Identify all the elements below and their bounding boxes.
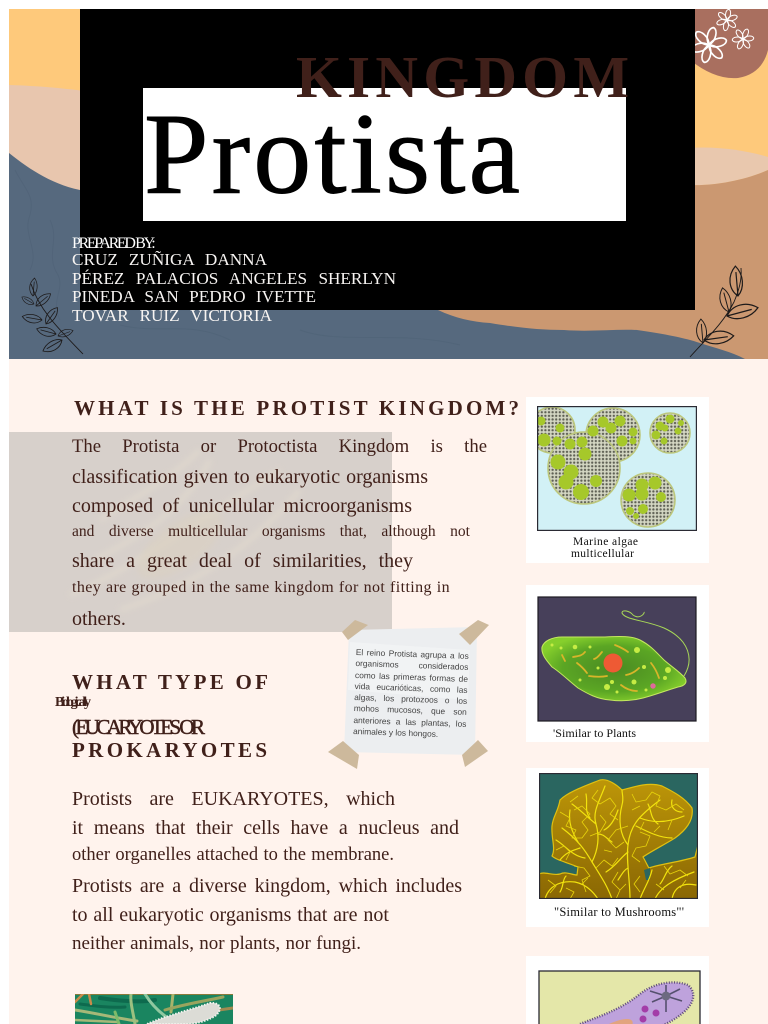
card: similar to plants [526, 585, 709, 742]
author name 3: PINEDA SAN PEDRO IVETTE [72, 286, 316, 306]
author name 2: PÉREZ PALACIOS ANGELES SHERLYN [72, 268, 396, 288]
text in note paper: El reino Protista agrupa a los organismos considerados como las primeras formas de vida eucarióticas, como las algas, los protozoos o los mohos mucosos, que son anteriores a las plantas, los animales y los hongos. [353, 647, 469, 739]
icon: left leaf sprig [20, 278, 83, 355]
prepared by label: PREPARED BY: [72, 235, 153, 252]
text block: protist kingdom definition: they are grouped in the same kingdom for not fitting in [72, 579, 450, 596]
white title box [143, 88, 626, 221]
icon: right leaf sprig [690, 266, 759, 357]
text block: eukaryotes explanation: Protists are a diverse kingdom, which includes [72, 875, 462, 897]
card: marine algae: multicellular [571, 548, 634, 560]
author name 1: CRUZ ZUÑIGA DANNA [72, 250, 267, 268]
prepared by credits [72, 235, 396, 324]
title: Protista: Protista [144, 90, 520, 218]
black title panel [80, 9, 695, 310]
card: marine algae [526, 397, 709, 563]
decorative brown circle with flowers [687, 8, 768, 78]
text block: protist kingdom definition: share a great deal of similarities, they [72, 550, 413, 572]
text block: eukaryotes explanation: other organelles attached to the membrane. [72, 844, 394, 864]
card: similar to mushrooms [526, 768, 709, 927]
heading: what type of [55, 670, 268, 762]
heading: what type of: WHAT TYPE OF [72, 670, 268, 694]
card: similar to mushrooms: "Similar to Mushrooms"' [554, 905, 684, 919]
heading: what type of: PROKARYOTES [72, 738, 267, 762]
text block: protist kingdom definition: The Protista or Protoctista Kingdom is the [72, 436, 487, 457]
banner background [9, 9, 768, 359]
author name 4: TOVAR RUIZ VICTORIA [72, 306, 272, 324]
text block: eukaryotes explanation: Protists are EUKARYOTES, which [72, 788, 395, 810]
card: paramecium illustration [526, 956, 709, 1024]
text block: eukaryotes explanation [72, 788, 462, 954]
title: Kingdom: KINGDOM [296, 44, 629, 110]
text block: eukaryotes explanation: it means that their cells have a nucleus and [72, 817, 459, 839]
note paper with tape [328, 620, 489, 769]
text block: protist kingdom definition: composed of unicellular microorganisms [72, 495, 412, 517]
card: marine algae: Marine algae [573, 536, 638, 548]
heading: what type of: (EUCARYOTES OR [72, 715, 205, 739]
text block: protist kingdom definition: classification given to eukaryotic organisms [72, 466, 428, 488]
text block: protist kingdom definition: and diverse multicellular organisms that, although not [72, 522, 470, 540]
photo: green blades and fuzzy protist [75, 994, 233, 1024]
text block: eukaryotes explanation: to all eukaryotic organisms that are not [72, 904, 389, 926]
text block: protist kingdom definition [72, 436, 487, 630]
heading: what is the protist kingdom: WHAT IS THE PROTIST KINGDOM? [74, 396, 519, 420]
card: similar to plants: 'Similar to Plants [553, 726, 636, 740]
text block: protist kingdom definition: others. [72, 608, 126, 630]
text block: eukaryotes explanation: neither animals, nor plants, nor fungi. [72, 933, 361, 954]
heading: what type of: Biologically [55, 695, 91, 710]
grey feather panel [9, 432, 392, 632]
